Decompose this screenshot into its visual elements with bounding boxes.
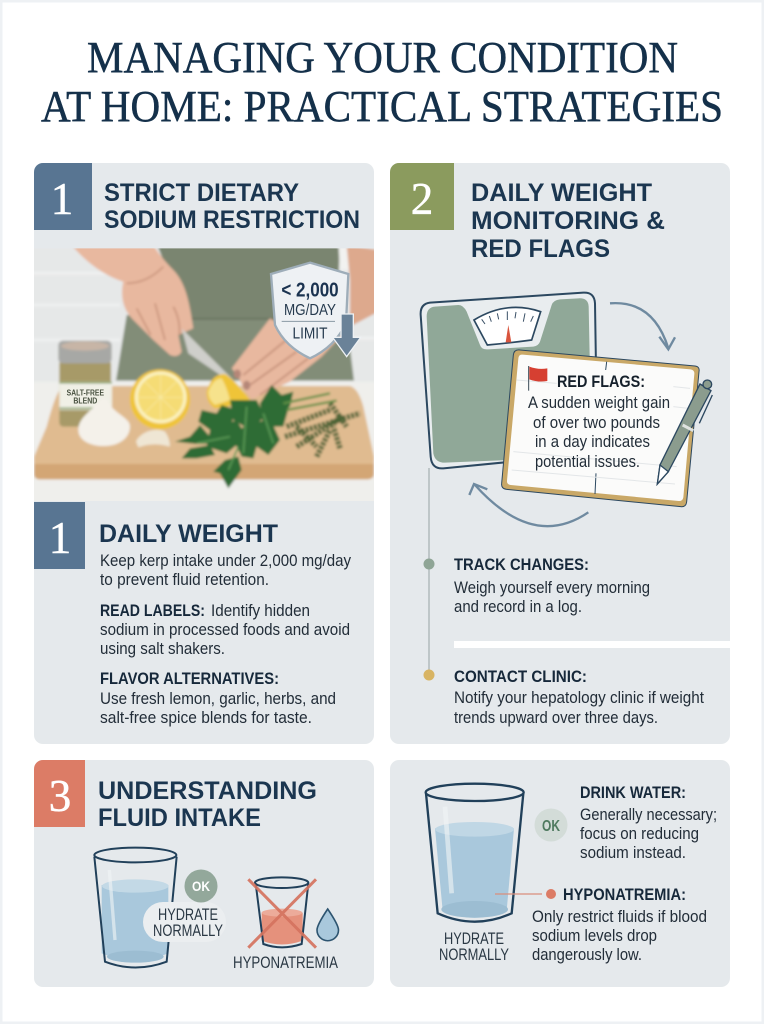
step: track changes: Weigh yourself every morning	[454, 578, 650, 597]
label: hydrate normally with ok badge: HYDRATE	[158, 905, 218, 924]
notebook	[502, 350, 699, 507]
text: hyponatremia: dangerously low.	[532, 945, 642, 964]
label: hydrate normally: HYDRATE	[444, 929, 504, 948]
label: hydrate normally with ok badge: NORMALLY	[153, 921, 223, 940]
label: hydrate normally	[439, 929, 509, 964]
title: MANAGING YOUR CONDITION	[87, 33, 678, 82]
icon: red flag	[529, 366, 547, 391]
text: flavor alternatives: salt-free spice blends for taste.	[100, 708, 312, 727]
number badge 3	[34, 760, 85, 827]
number badge 1 lower	[34, 502, 85, 569]
callout text: red flags: potential issues.	[535, 452, 640, 471]
heading: strict dietary sodium restriction: STRICT DIETARY	[104, 179, 299, 207]
icon: full glass of water	[94, 848, 177, 967]
step: track changes	[424, 555, 650, 616]
illustration: scale and notebook	[421, 293, 712, 526]
jar label: salt-free blend: BLEND	[73, 397, 98, 406]
icon: down arrow	[333, 314, 361, 357]
text: flavor alternatives: FLAVOR ALTERNATIVES:	[100, 669, 279, 688]
title: AT HOME: PRACTICAL STRATEGIES	[41, 82, 723, 131]
number badge 3: 3	[49, 771, 71, 821]
panel: strict dietary sodium restriction	[30, 163, 378, 744]
text: read labels: using salt shakers.	[100, 639, 225, 658]
timeline line	[428, 468, 430, 675]
heading: daily weight monitoring and red flags: RED FLAGS	[471, 235, 610, 263]
callout text: red flags: A sudden weight gain	[528, 393, 670, 412]
text: flavor alternatives: Use fresh lemon, garlic, herbs, and	[100, 689, 336, 708]
icon: large glass of water	[426, 784, 524, 922]
text: intake: Keep kerp intake under 2,000 mg/day	[100, 551, 351, 570]
label: hyponatremia: HYPONATREMIA	[233, 953, 339, 972]
panel: understanding fluid intake	[34, 760, 374, 987]
text: drink water	[580, 783, 717, 862]
text: hyponatremia: HYPONATREMIA:	[563, 885, 686, 904]
text: drink water: sodium instead.	[580, 843, 686, 862]
text: hyponatremia: Only restrict fluids if blood	[532, 907, 707, 926]
step: contact clinic: Notify your hepatology clinic if weight	[454, 688, 704, 707]
step: contact clinic: CONTACT CLINIC:	[454, 667, 587, 686]
icon: water drop	[317, 909, 338, 941]
text: hyponatremia: sodium levels drop	[532, 926, 657, 945]
text: hyponatremia	[532, 885, 707, 964]
number badge 2: 2	[411, 174, 433, 224]
jar label: salt-free blend	[66, 390, 104, 404]
heading: strict dietary sodium restriction: SODIUM RESTRICTION	[104, 206, 360, 234]
arrow: bottom curve	[469, 484, 588, 526]
text: intake: to prevent fluid retention.	[100, 570, 269, 589]
badge: under 2,000 mg/day limit: LIMIT	[292, 326, 328, 343]
callout text: red flags: in a day indicates	[535, 432, 650, 451]
text: read labels: READ LABELS:	[100, 601, 205, 620]
text: intake	[100, 551, 351, 589]
step: contact clinic	[424, 667, 704, 727]
number badge 1: 1	[51, 174, 73, 224]
text: drink water: Generally necessary;	[580, 805, 717, 824]
step: contact clinic: trends upward over three days.	[454, 708, 658, 727]
number badge 1	[34, 163, 92, 230]
heading: daily weight monitoring and red flags: DAILY WEIGHT	[471, 179, 652, 207]
photo: preparing salt-free ingredients on a cutting board	[30, 243, 378, 505]
panel: fluid guidance	[390, 760, 730, 987]
panel: daily weight monitoring and red flags	[390, 163, 730, 744]
callout text: red flags: RED FLAGS:	[557, 372, 645, 391]
step: track changes: TRACK CHANGES:	[454, 555, 589, 574]
icon: ok badge: OK	[542, 818, 560, 835]
label: hydrate normally with ok badge: OK	[192, 878, 210, 894]
badge: under 2,000 mg/day limit	[271, 263, 361, 358]
text: drink water: focus on reducing	[580, 824, 699, 843]
heading: understanding fluid intake: UNDERSTANDING	[98, 777, 317, 805]
heading: understanding fluid intake: FLUID INTAKE	[98, 804, 261, 832]
icon: pen	[657, 380, 712, 484]
badge: under 2,000 mg/day limit: MG/DAY	[284, 302, 336, 319]
badge: under 2,000 mg/day limit: < 2,000	[281, 280, 339, 302]
icon: crossed out glass	[248, 877, 316, 948]
title	[41, 33, 723, 131]
callout text: red flags	[528, 372, 670, 471]
text: read labels: sodium in processed foods and avoid	[100, 620, 350, 639]
label: hydrate normally with ok badge	[143, 870, 226, 942]
heading: daily weight: DAILY WEIGHT	[99, 520, 278, 548]
heading: daily weight monitoring and red flags: MONITORING &	[471, 207, 665, 235]
arrow: top curve	[610, 303, 675, 349]
jar label: salt-free blend: SALT-FREE	[67, 388, 105, 397]
number badge 2	[390, 163, 454, 230]
pointer: glass to hyponatremia	[495, 889, 556, 899]
icon: bathroom scale	[421, 293, 597, 468]
icon: ok badge	[534, 808, 568, 842]
heading: daily weight monitoring and red flags	[471, 179, 665, 263]
callout text: red flags: of over two pounds	[533, 413, 660, 432]
text: flavor alternatives	[100, 669, 336, 727]
text: read labels: Identify hidden	[211, 601, 310, 620]
label: hydrate normally: NORMALLY	[439, 945, 509, 964]
text: drink water: DRINK WATER:	[580, 783, 686, 802]
heading: understanding fluid intake	[98, 777, 317, 832]
step: track changes: and record in a log.	[454, 597, 582, 616]
number badge 1 lower: 1	[49, 513, 71, 563]
text: read labels	[100, 601, 350, 658]
heading: strict dietary sodium restriction	[104, 179, 360, 234]
